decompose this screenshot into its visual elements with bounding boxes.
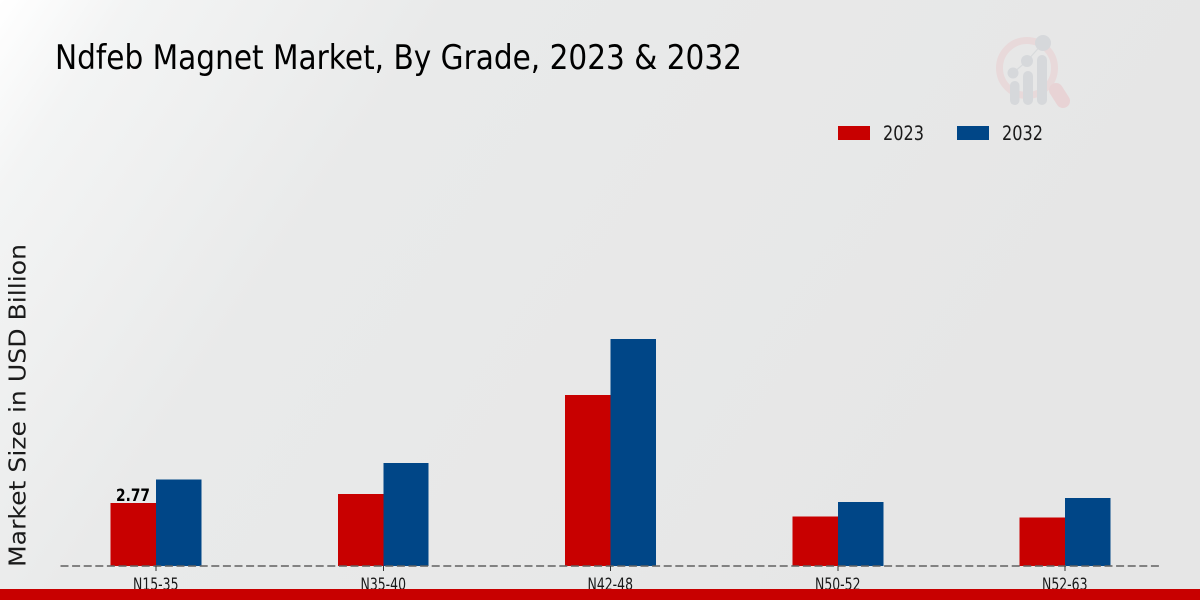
x axis baseline [60,565,1160,567]
bar chart [110,339,1110,566]
y axis title: Market Size in USD Billion [4,244,32,567]
group: N42-48 [565,339,656,566]
x axis labels: N52-63 [1042,575,1088,594]
footer bar [0,589,1200,600]
group: N50-52 [792,502,884,566]
icon: watermark magnifier logo [1000,35,1063,105]
x axis ticks [156,566,1065,571]
data label: 2.77: 2.77 [116,486,150,505]
title: Ndfeb Magnet Market, By Grade, 2023 & 2032 [55,38,742,77]
group: N15-35 [110,480,202,566]
x axis labels: N35-40 [360,575,406,594]
legend item: 2023 [838,122,924,145]
x axis labels: N50-52 [815,575,860,594]
x axis labels: N42-48 [588,575,633,594]
group: N52-63 [1020,498,1110,566]
group: N35-40 [338,463,428,566]
legend item: 2032: 2032 [1002,122,1043,145]
x axis labels: N15-35 [133,575,178,594]
legend item: 2023: 2023 [883,122,924,145]
legend item: 2032 [957,122,1043,145]
legend [838,122,1043,145]
x axis labels [133,575,1088,594]
